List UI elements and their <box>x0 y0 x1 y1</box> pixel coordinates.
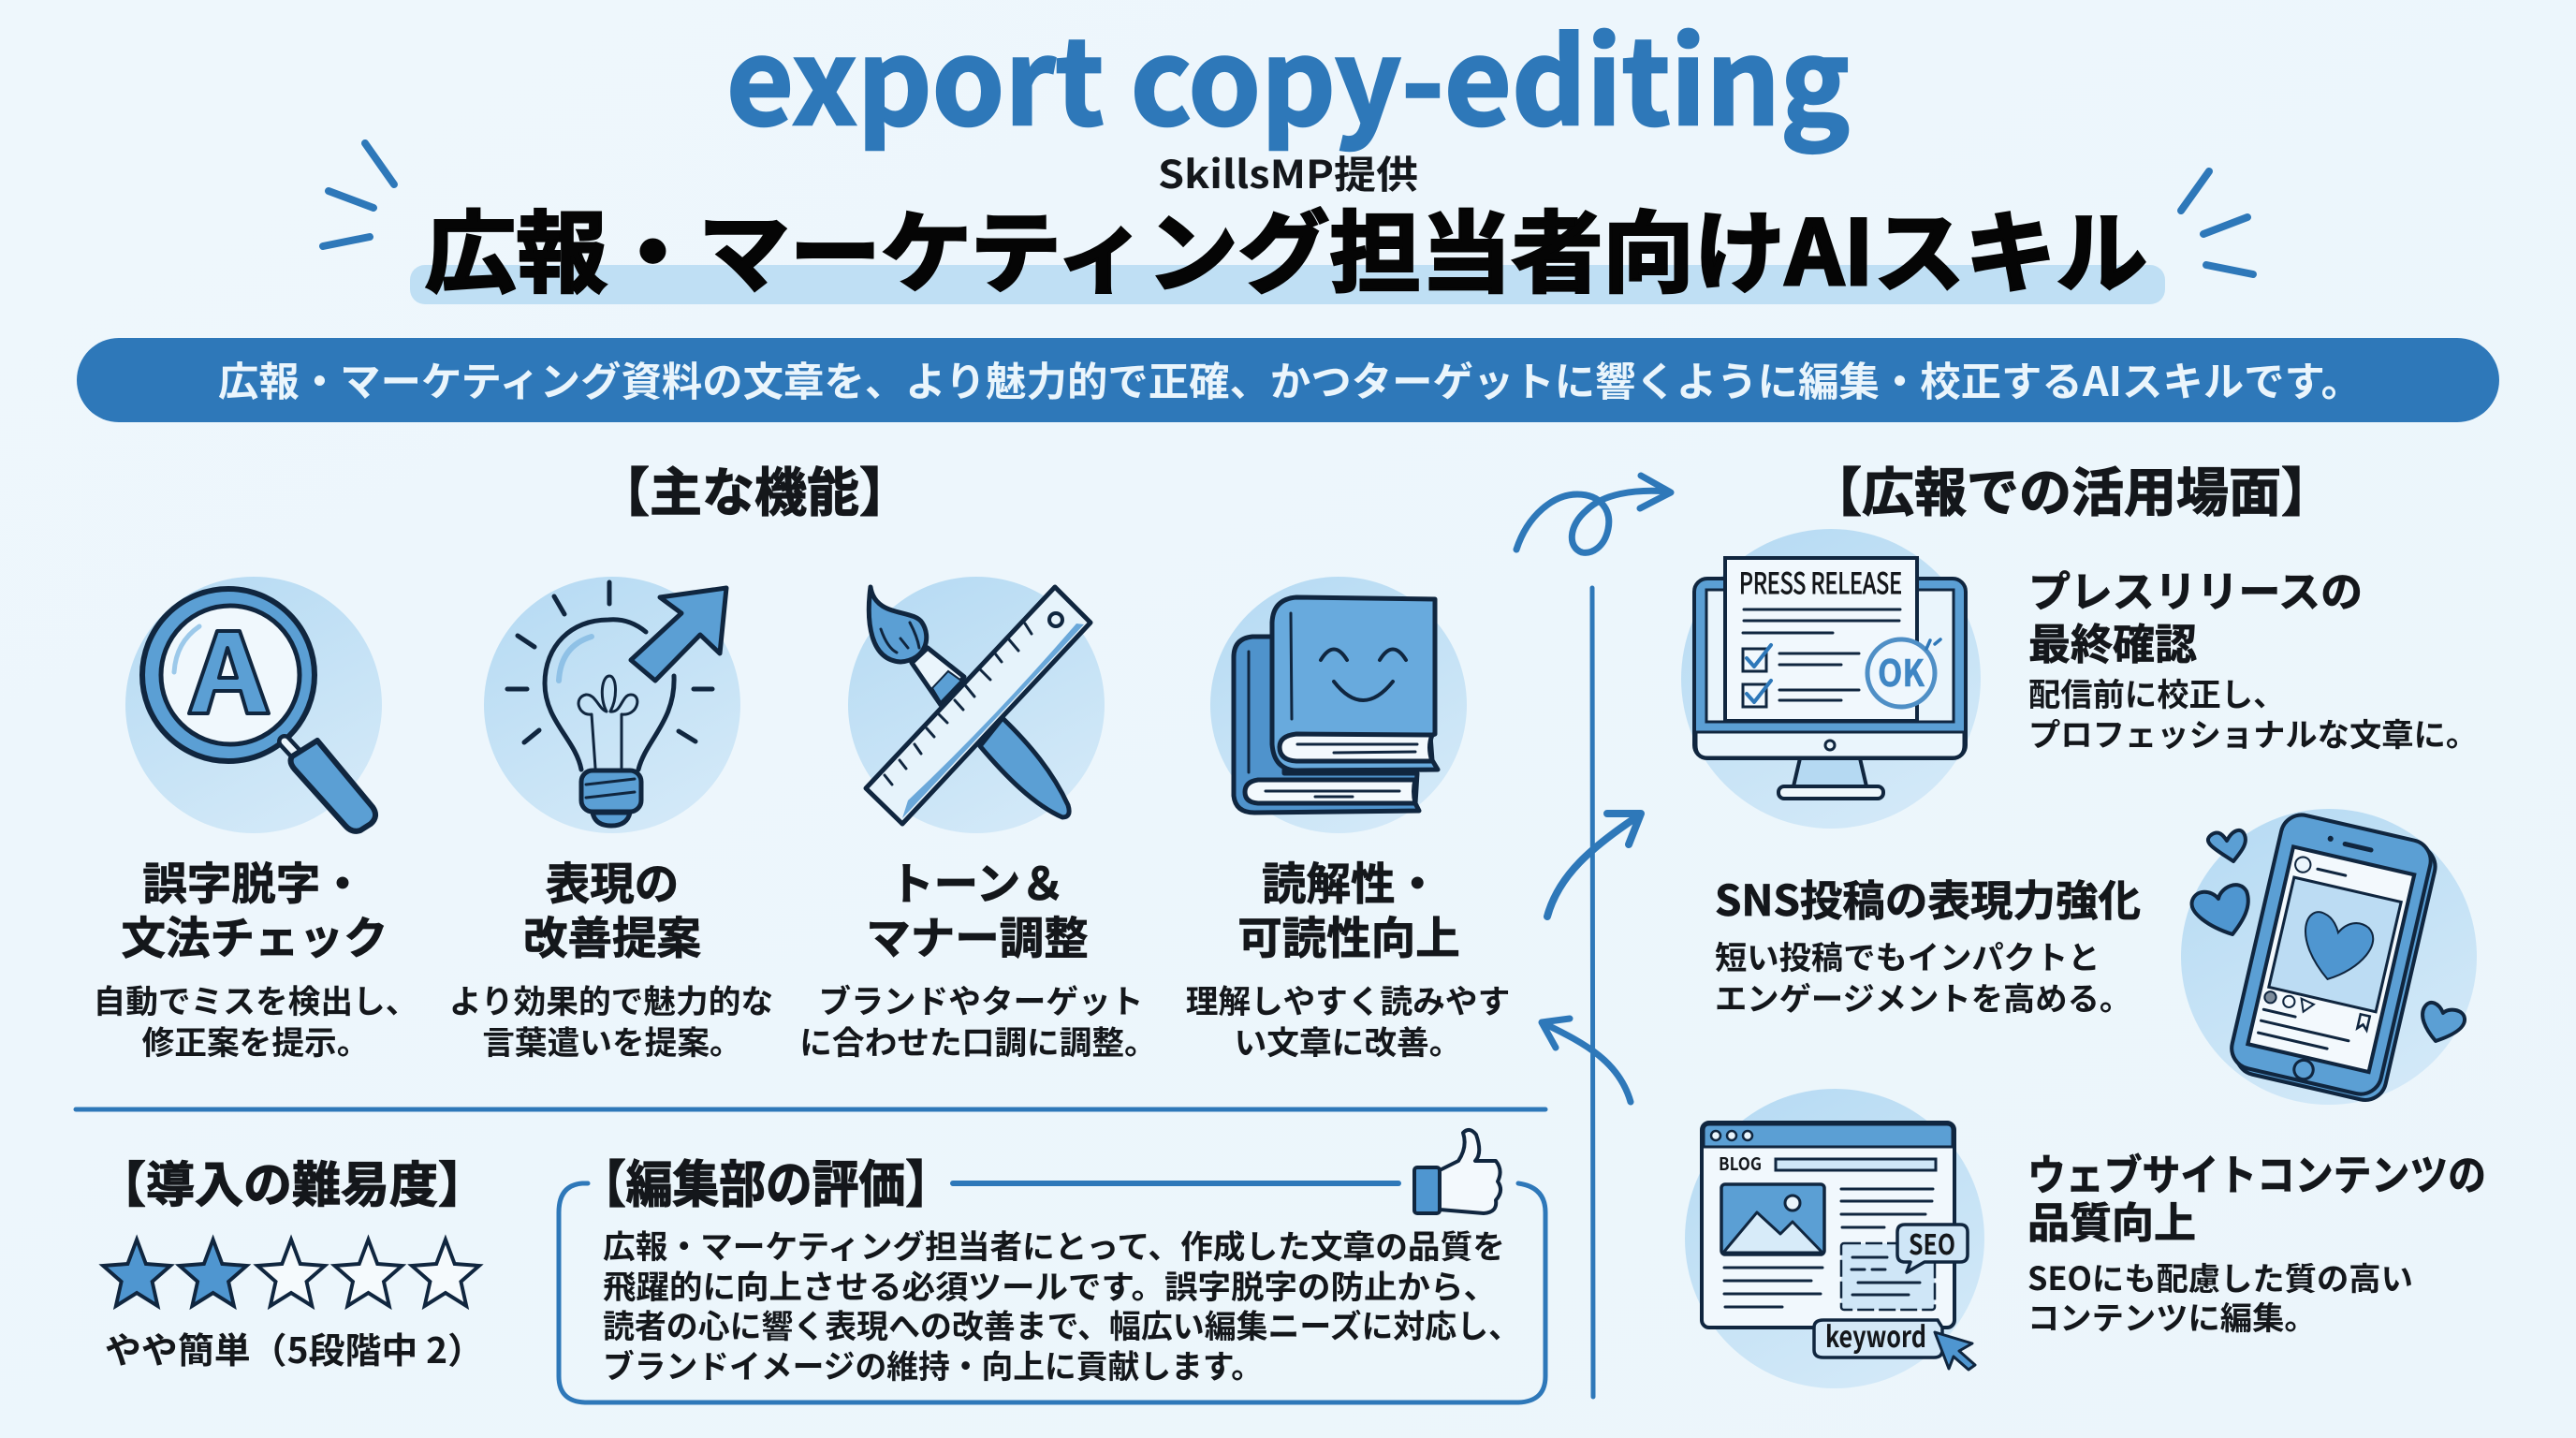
provider label: SkillsMP提供 <box>1158 143 1418 199</box>
panel: editorial review <box>559 1130 1545 1402</box>
feature 2 text <box>449 848 773 1064</box>
item 1 text: プロフェッショナルな文章に。 <box>2028 709 2478 756</box>
feature 3 text: に合わせた口調に調整。 <box>799 1017 1157 1064</box>
difficulty label: やや簡単（5段階中 2） <box>105 1322 484 1373</box>
subtitle: 広報・マーケティング担当者向けAIスキル <box>425 183 2147 311</box>
feature 2 text: 言葉遣いを提案。 <box>482 1017 742 1064</box>
feature 3 text: マナー調整 <box>866 902 1089 967</box>
burst marks right <box>2181 171 2253 274</box>
item 2 text <box>1715 867 2141 1020</box>
review body text: 広報・マーケティング担当者にとって、作成した文章の品質を <box>603 1221 1505 1268</box>
review body text: ブランドイメージの維持・向上に貢献します。 <box>603 1341 1263 1387</box>
item 3 text: 品質向上 <box>2027 1189 2196 1250</box>
item 3 text: コンテンツに編集。 <box>2027 1292 2317 1339</box>
arrow: back from web <box>1542 1019 1631 1102</box>
icon: thumbs up <box>1414 1130 1500 1213</box>
summary banner <box>77 338 2499 422</box>
arrow: swirl <box>1516 476 1671 552</box>
icon: light bulb with arrow <box>484 577 740 833</box>
feature 4 text <box>1186 848 1510 1064</box>
item 1 text <box>2028 558 2478 756</box>
feature 3 text: ブランドやターゲット <box>819 976 1143 1022</box>
item 1 text: プレスリリースの <box>2028 558 2363 619</box>
icon: blog window with SEO: SEO <box>1909 1222 1955 1263</box>
heading: main features: 【主な機能】 <box>597 451 912 527</box>
icon: monitor with press release <box>1681 529 1981 829</box>
icon: blog window with SEO: BLOG <box>1719 1151 1762 1176</box>
review body text <box>603 1221 1520 1387</box>
feature 1 text: 修正案を提示。 <box>142 1017 369 1064</box>
feature 2 text: より効果的で魅力的な <box>449 976 773 1022</box>
feature 3 text: トーン＆ <box>889 848 1065 913</box>
item 1 text: 最終確認 <box>2028 610 2197 671</box>
feature 4 text: い文章に改善。 <box>1235 1017 1461 1064</box>
review body text: 飛躍的に向上させる必須ツールです。誤字脱字の防止から、 <box>603 1261 1497 1308</box>
feature 4 text: 理解しやすく読みやす <box>1186 976 1510 1022</box>
item 3 text <box>2027 1141 2486 1339</box>
arrow: up to SNS <box>1547 814 1641 917</box>
heading: difficulty: 【導入の難易度】 <box>97 1146 487 1216</box>
feature 1 text: 誤字脱字・ <box>142 848 365 913</box>
summary banner: 広報・マーケティング資料の文章を、より魅力的で正確、かつターゲットに響くように編集・校正するAIスキルです。 <box>218 350 2362 408</box>
subtitle highlight <box>410 265 2165 304</box>
feature 2 text: 表現の <box>546 848 679 913</box>
panel heading: 【編集部の評価】 <box>579 1143 952 1217</box>
star rating: 2 of 5 <box>103 1240 479 1306</box>
feature 1 text <box>94 848 417 1064</box>
feature 1 text: 自動でミスを検出し、 <box>94 976 417 1022</box>
burst marks left <box>323 143 394 246</box>
feature 2 text: 改善提案 <box>523 902 701 967</box>
icon: blog window with SEO: keyword <box>1825 1313 1926 1356</box>
feature 4 text: 読解性・ <box>1262 848 1440 913</box>
review body text: 読者の心に響く表現への改善まで、幅広い編集ニーズに対応し、 <box>603 1300 1520 1347</box>
item 3 text: ウェブサイトコンテンツの <box>2027 1141 2486 1202</box>
heading: use cases: 【広報での活用場面】 <box>1809 451 2334 527</box>
item 3 text: SEOにも配慮した質の高い <box>2027 1253 2413 1299</box>
icon: smiling books <box>1210 577 1467 833</box>
item 1 text: 配信前に校正し、 <box>2028 668 2285 715</box>
icon: monitor with press release: PRESS RELEASE <box>1739 560 1902 602</box>
icon: brush and ruler <box>848 577 1105 833</box>
item 2 text: SNS投稿の表現力強化 <box>1715 867 2141 928</box>
feature 3 text <box>799 848 1157 1064</box>
feature 4 text: 可読性向上 <box>1237 902 1460 967</box>
icon: smartphone with hearts <box>2181 809 2477 1105</box>
icon: blog window with SEO <box>1685 1089 1984 1388</box>
icon: monitor with press release: OK <box>1878 645 1925 697</box>
item 2 text: 短い投稿でもインパクトと <box>1715 932 2100 978</box>
item 2 text: エンゲージメントを高める。 <box>1715 973 2131 1020</box>
icon: magnifier with letter A <box>125 577 382 833</box>
feature 1 text: 文法チェック <box>122 902 388 967</box>
